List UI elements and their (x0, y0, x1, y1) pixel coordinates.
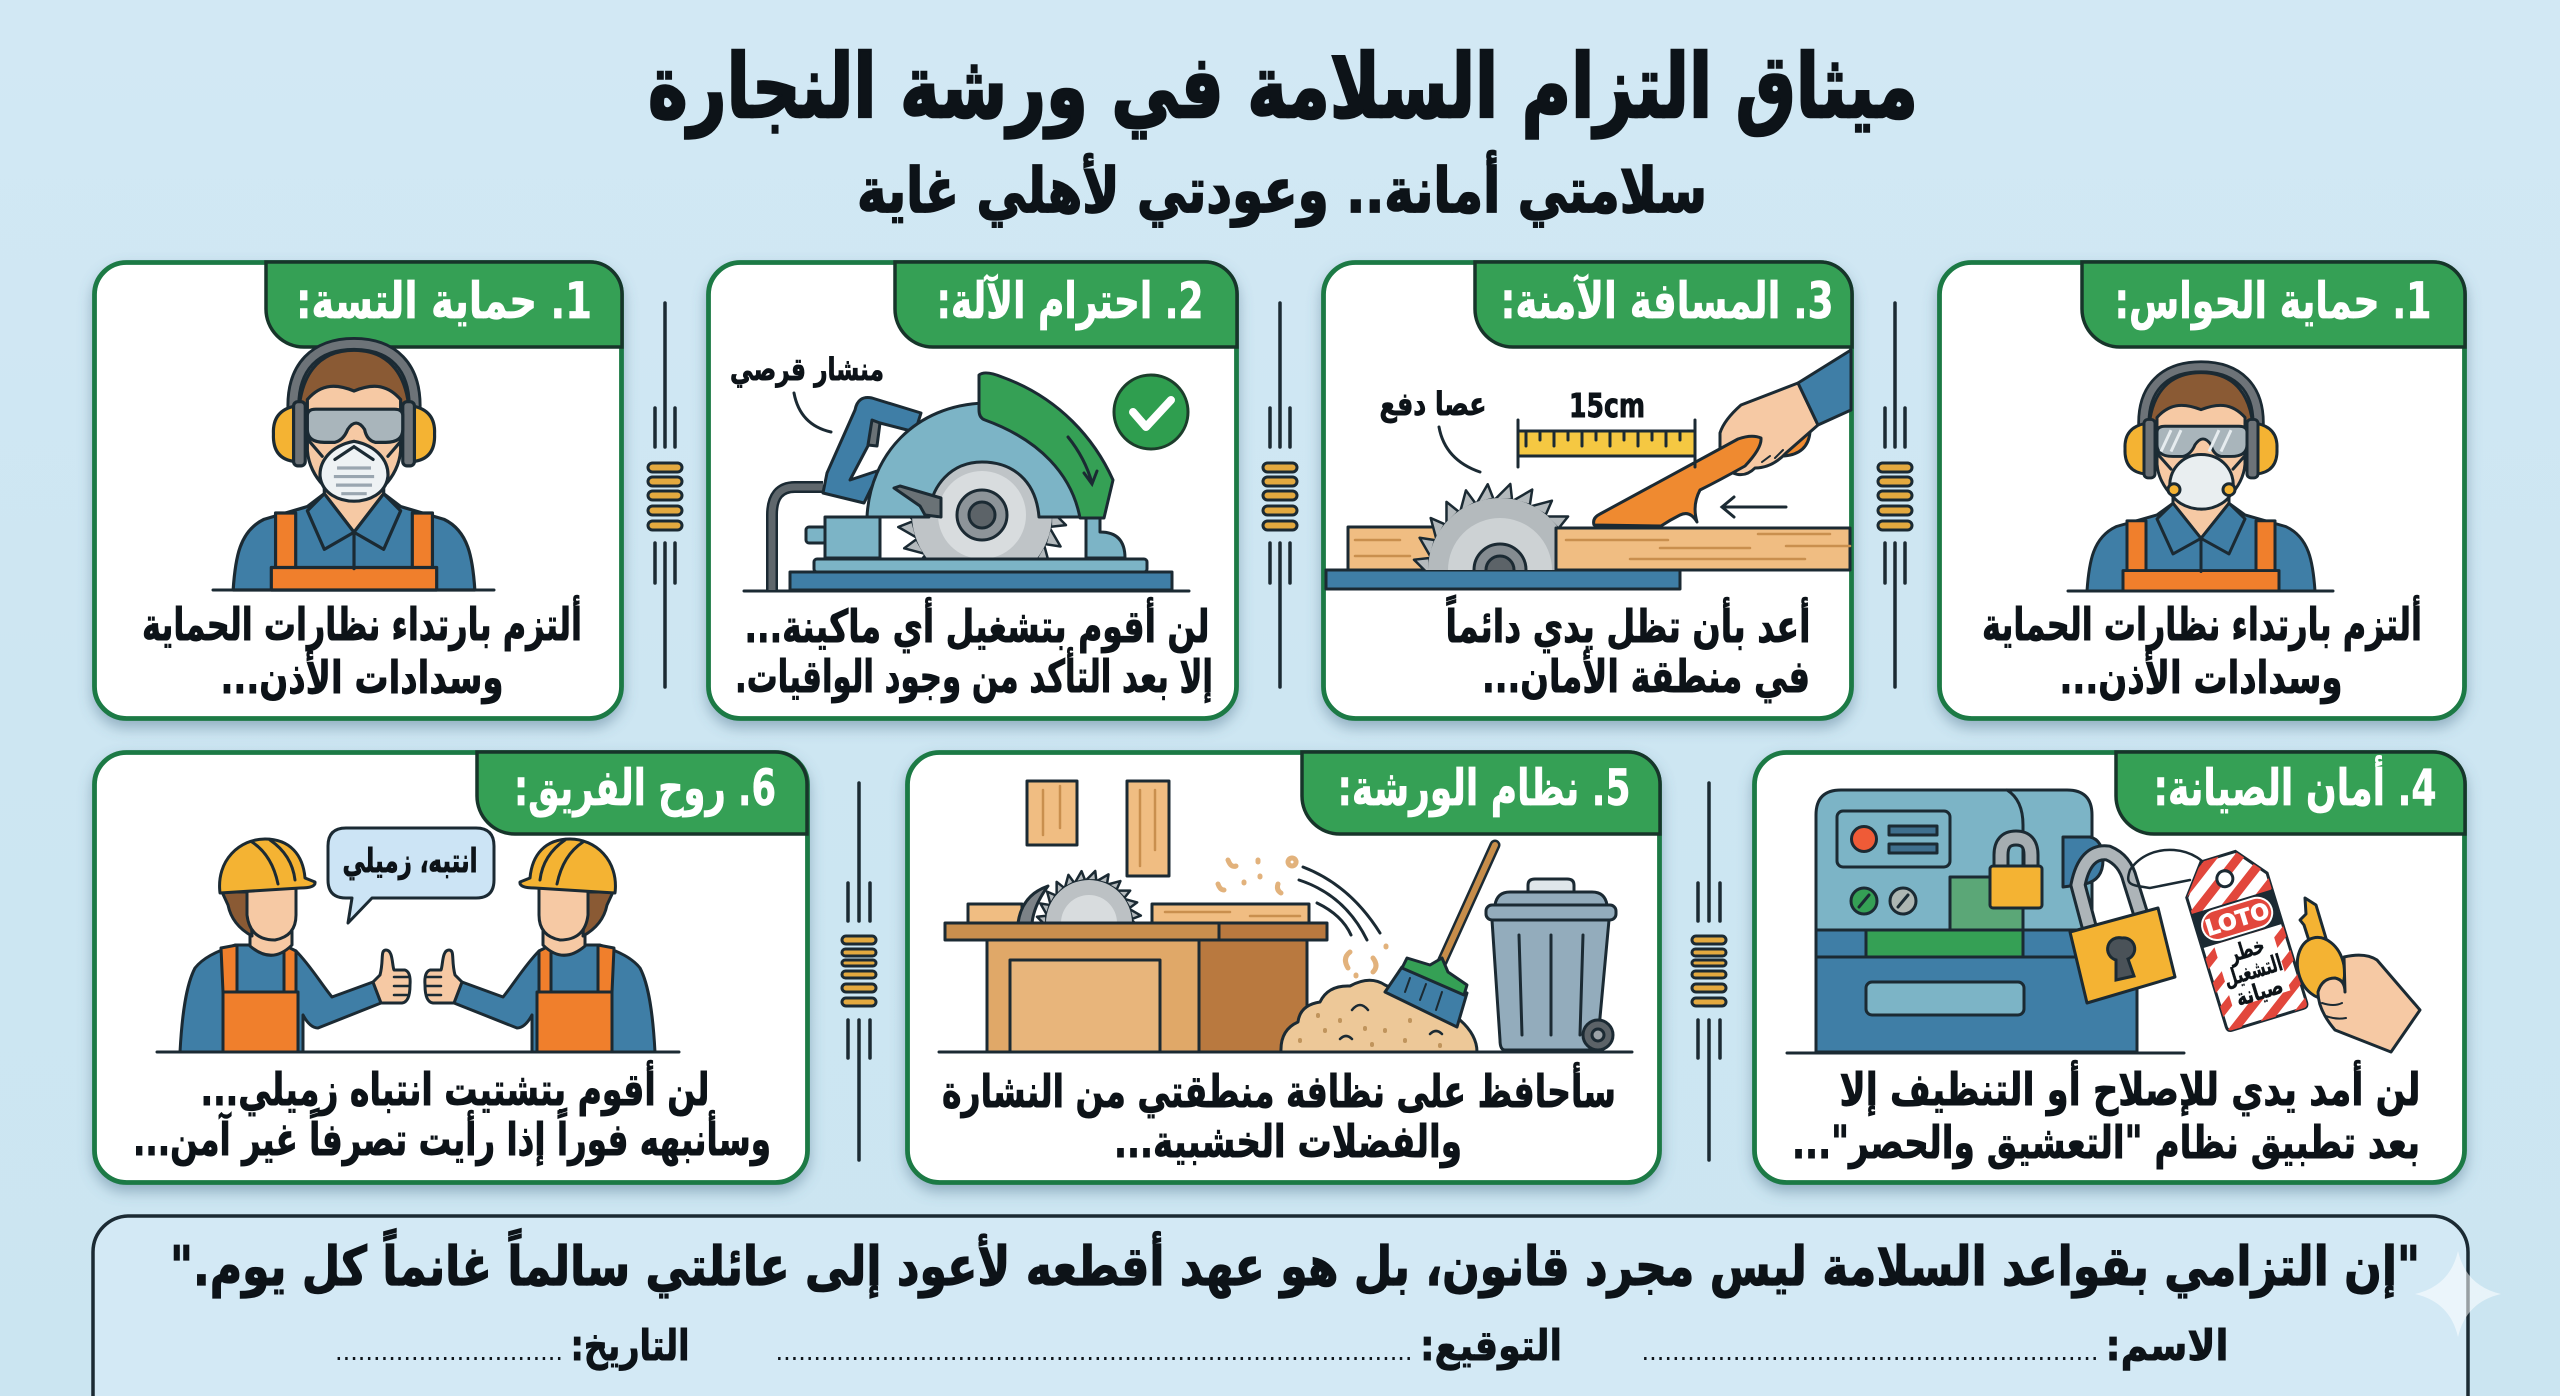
body text: workshop order: والفضلات الخشبية... (1114, 1115, 1462, 1168)
title: ميثاق التزام السلامة في ورشة النجارة (648, 35, 1918, 139)
heading tab: senses protection: 1. حماية الحواس: (2114, 272, 2432, 331)
body text: safe distance: أعد بأن تظل يدي دائماً (1446, 594, 1810, 653)
heading tab: workshop order (1302, 752, 1660, 834)
hand (2318, 955, 2420, 1052)
body text: team spirit (133, 1060, 771, 1166)
connector: row 2 left (842, 783, 876, 1160)
connector: row 1 right (1878, 303, 1912, 687)
panel: 2 respect the machine (708, 262, 1237, 718)
body text: workshop order (942, 1062, 1616, 1168)
illustration: push stick and table saw: عصا دفع (1380, 385, 1486, 423)
heading tab: safe distance: 3. المسافة الآمنة: (1500, 272, 1834, 330)
heading tab: respect the machine (895, 262, 1237, 347)
key (2291, 898, 2351, 1004)
field: name: ............................................................ (1642, 1338, 2098, 1366)
panel: 1 respiratory protection (left) (94, 262, 622, 718)
LOTO tag: خطر (2225, 933, 2268, 968)
body text: respect the machine: إلا بعد التأكد من وجود الواقيات. (735, 647, 1213, 703)
body text: respiratory protection: وسدادات الأذن... (220, 650, 504, 704)
heading tab: workshop order: 5. نظام الورشة: (1338, 759, 1630, 818)
body text: safe distance: في منطقة الأمان... (1482, 649, 1810, 703)
field: name: الاسم: (2106, 1321, 2228, 1370)
heading tab: team spirit (477, 752, 807, 834)
body text: respiratory protection: ألتزم بارتداء نظارات الحماية (142, 595, 582, 651)
field: signature: التوقيع: (1420, 1321, 1562, 1371)
illustration: two workers thumbs up (157, 828, 679, 1052)
panel: 6 team spirit (94, 752, 808, 1182)
body text: respect the machine (735, 597, 1213, 703)
sawdust pile (1281, 980, 1477, 1052)
panel: 3 safe distance (1324, 262, 1852, 718)
panel: 1 senses protection (right) (1940, 262, 2465, 718)
field: date: التاريخ: (570, 1321, 690, 1371)
field: name (1642, 1321, 2228, 1370)
heading tab: safe distance (1475, 262, 1852, 347)
heading tab: respiratory protection: 1. حماية التسة: (296, 272, 592, 330)
right worker (425, 839, 655, 1052)
field: date: .............................. (335, 1338, 563, 1366)
illustration: circular saw (730, 352, 1189, 599)
heading tab: maintenance safety (2116, 752, 2465, 834)
body text: respiratory protection (142, 595, 582, 704)
check mark (1114, 375, 1188, 449)
connector: row 2 right (1692, 783, 1726, 1160)
heading tab: respiratory protection (266, 262, 622, 347)
LOTO tag: LOTO (2203, 899, 2273, 942)
body text: respect the machine: لن أقوم بتشغيل أي ماكينة... (744, 597, 1210, 653)
panel: pledge and signature (93, 1216, 2468, 1396)
illustration: circular saw: منشار قرصي (730, 352, 884, 388)
label: 15cm: 15cm (1569, 386, 1645, 425)
body text: maintenance safety (1792, 1060, 2420, 1169)
connector: row 1 left (648, 303, 682, 687)
illustration: lockout tagout machine (1786, 788, 2422, 1054)
heading tab: respect the machine: 2. احترام الآلة: (936, 272, 1204, 331)
field: signature: .................................................................................... (776, 1338, 1412, 1366)
body text: team spirit: وسأنبهه فوراً إذا رأيت تصرفاً غير آمن... (133, 1107, 771, 1166)
illustration: worker with goggles and respirator (2068, 367, 2333, 591)
heading tab: team spirit: 6. روح الفريق: (514, 759, 776, 818)
LOTO tag: التشغيل (2221, 950, 2286, 993)
illustration: table saw, broom, bin (939, 781, 1632, 1052)
field: date (335, 1321, 690, 1371)
illustration: worker with dust mask (213, 344, 494, 590)
body text: senses protection (1982, 595, 2422, 704)
body text: senses protection: وسدادات الأذن... (2060, 650, 2342, 704)
field: signature (776, 1321, 1562, 1371)
trash bin (1492, 920, 1609, 1050)
heading tab: senses protection (2082, 262, 2465, 347)
body text: workshop order: سأحافظ على نظافة منطقتي من النشارة (942, 1062, 1616, 1118)
speech bubble (328, 828, 494, 923)
LOTO tag: صيانة (2233, 973, 2286, 1012)
broom (1442, 845, 1495, 962)
left worker (180, 839, 410, 1052)
illustration: push stick and table saw (1324, 348, 1852, 590)
subtitle: سلامتي أمانة.. وعودتي لأهلي غاية (857, 150, 1707, 227)
icon: sparkle watermark (2415, 1251, 2501, 1337)
speech bubble: انتبه، زميلي (342, 841, 478, 880)
connector: row 1 middle (1263, 303, 1297, 687)
heading tab: maintenance safety: 4. أمان الصيانة: (2154, 755, 2436, 817)
body text: team spirit: لن أقوم بتشتيت انتباه زميلي... (200, 1060, 710, 1116)
panel: 4 maintenance safety (1754, 752, 2465, 1182)
body text: safe distance (1446, 594, 1810, 703)
LOTO tag (2185, 850, 2308, 1032)
panel: 5 workshop order (908, 752, 1660, 1182)
